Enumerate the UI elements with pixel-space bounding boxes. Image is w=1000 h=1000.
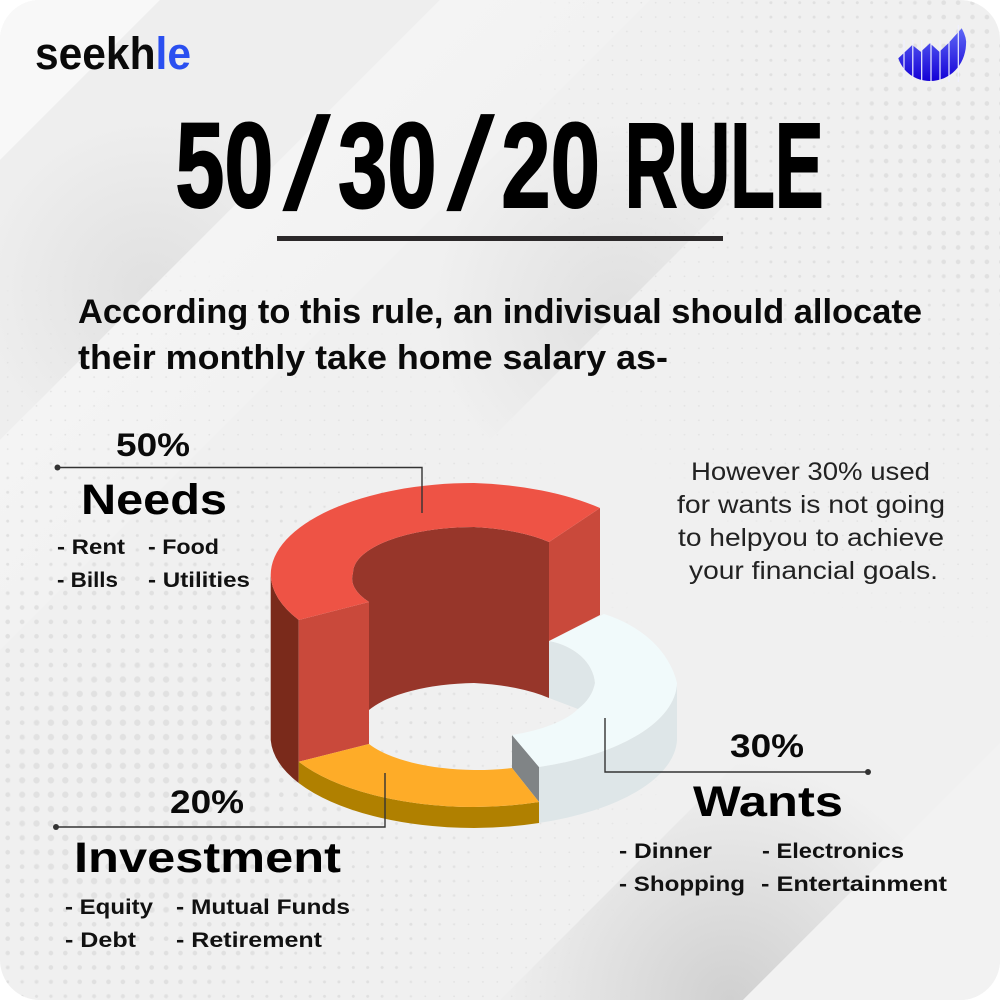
label: wants: Wants [693,778,843,826]
callout line: investment [53,773,385,830]
investment segment [299,744,539,828]
label: wants: - Dinner [619,840,712,863]
title: 50 [175,99,273,234]
3D donut chart [271,483,677,828]
label: investment: - Equity [65,896,153,919]
label: investment: - Mutual Funds [176,896,350,919]
label: wants [619,728,947,896]
label: needs: - Food [148,536,219,559]
callout line: needs [54,464,422,513]
label: investment: 20% [170,784,244,820]
title: RULE [625,99,824,234]
side note: to helpyou to achieve [678,524,944,552]
label: wants: 30% [730,728,804,764]
title: / [283,91,331,238]
logo: seekhle wordmark: seekhle [35,28,191,79]
title: 20 [501,99,600,234]
title [175,91,824,238]
title: 30 [338,99,437,234]
intro text: According to this rule, an indivisual should allocate [78,293,922,331]
label: needs [57,427,250,592]
label: wants: - Electronics [762,840,904,863]
intro text [78,293,922,377]
wants segment [512,614,677,823]
label: wants: - Entertainment [761,873,947,896]
side note: your financial goals. [689,557,938,585]
label: investment [65,784,350,952]
side note [677,458,945,585]
label: wants: - Shopping [619,873,745,896]
label: needs: Needs [81,476,227,524]
label: needs: 50% [116,427,190,463]
label: investment: Investment [74,834,341,882]
title underline [277,236,723,241]
icon: bar chart bowl logo [898,25,966,82]
intro text: their monthly take home salary as- [78,339,668,377]
needs segment [271,483,600,783]
label: needs: - Bills [57,569,118,592]
side note: However 30% used [691,458,930,486]
label: investment: - Debt [65,929,136,952]
label: needs: - Rent [57,536,125,559]
title: / [447,91,495,238]
callout line: wants [605,718,871,775]
label: needs: - Utilities [148,569,250,592]
label: investment: - Retirement [176,929,322,952]
side note: for wants is not going [677,491,945,519]
